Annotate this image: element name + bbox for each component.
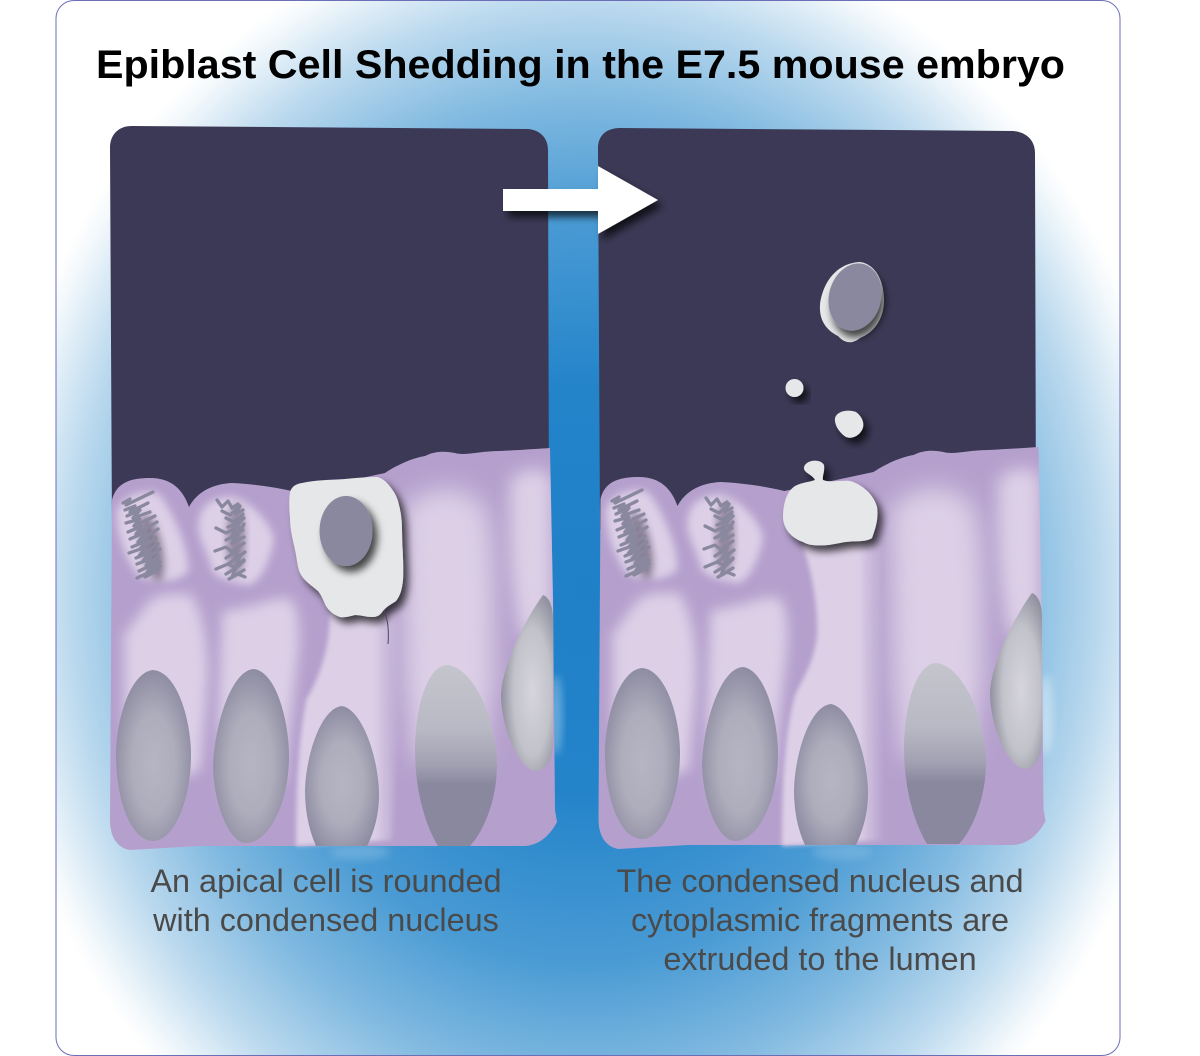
nucleated cells right: [605, 490, 1042, 844]
caption right: The condensed nucleus and: [616, 863, 1024, 899]
caption left: with condensed nucleus: [152, 902, 499, 938]
membrane crack: [384, 610, 388, 644]
caption left: An apical cell is rounded: [150, 863, 502, 899]
panel: left, apical cell rounded: [110, 126, 557, 850]
middle cell right: [782, 510, 884, 846]
floating cell with nucleus: [820, 258, 888, 342]
extruded cell remnant: [783, 461, 878, 546]
caption right: [616, 863, 1024, 977]
nucleated cells left: [116, 492, 553, 846]
glow accents: [330, 675, 1053, 860]
condensed nucleus: [320, 496, 372, 566]
middle cell left: [296, 612, 400, 846]
arrow: [503, 166, 658, 234]
title: Epiblast Cell Shedding in the E7.5 mouse embryo: [96, 43, 1065, 87]
fragment medium: [835, 411, 863, 438]
nucleus 3 right: [794, 704, 868, 845]
tissue right: [598, 447, 1046, 849]
rounded apical cell: [289, 477, 403, 617]
tissue left: [110, 448, 557, 850]
caption right: cytoplasmic fragments are: [631, 902, 1009, 938]
caption right: extruded to the lumen: [663, 941, 977, 977]
caption left: [150, 863, 502, 938]
lumen left: [110, 126, 549, 530]
fragment small: [786, 379, 804, 397]
lumen right: [598, 128, 1036, 530]
panel: right, extrusion: [598, 128, 1046, 849]
nucleus 3 left: [305, 706, 379, 846]
